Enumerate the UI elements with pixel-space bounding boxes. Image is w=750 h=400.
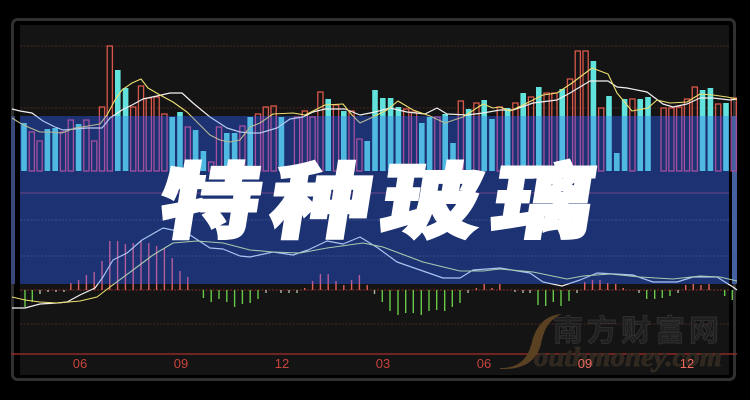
- watermark latin name: outhmoney.com: [534, 342, 722, 372]
- blue title band: [11, 116, 737, 284]
- title: 特种玻璃: [153, 158, 612, 249]
- time axis labels: 12: [275, 356, 289, 371]
- filled volume bars inside band: [21, 116, 729, 171]
- time axis labels: 06: [477, 356, 491, 371]
- grid lines: [11, 46, 737, 354]
- filled volume bars above band: [115, 61, 729, 116]
- MACD lines: [12, 228, 737, 308]
- watermark: [500, 314, 723, 372]
- time axis labels: 03: [376, 356, 390, 371]
- watermark swoosh: [500, 314, 562, 369]
- watermark chinese name: 南方财富网: [553, 315, 723, 348]
- volume bars chart: [21, 46, 736, 171]
- time axis labels: 09: [174, 356, 188, 371]
- time axis labels: [73, 356, 694, 371]
- hollow volume bars above band: [98, 45, 738, 116]
- moving average lines: [12, 68, 737, 142]
- time axis labels: 12: [680, 356, 694, 371]
- time axis labels: 06: [73, 356, 87, 371]
- MACD histogram: [25, 241, 732, 315]
- time axis labels: 09: [578, 356, 592, 371]
- hollow volume bars inside band: [28, 116, 738, 172]
